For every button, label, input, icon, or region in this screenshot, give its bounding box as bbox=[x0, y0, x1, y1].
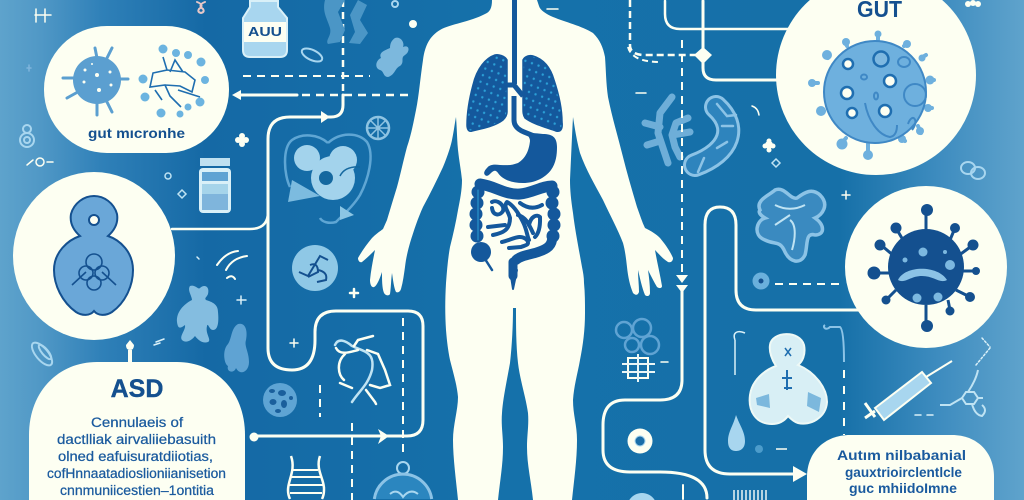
left lung bbox=[467, 55, 507, 131]
icon: rings and nodes bbox=[628, 272, 844, 500]
icon: water drop bbox=[728, 415, 745, 451]
body text: olned eafuisuratdiiotias, bbox=[58, 449, 213, 464]
icon: tangled chain and chip bbox=[616, 319, 659, 382]
icon: light blob bbox=[376, 38, 409, 77]
icon: heart with mouse shape bbox=[285, 135, 371, 223]
icon: jar bbox=[199, 158, 231, 213]
card text: Autım nilbabanial bbox=[837, 448, 966, 463]
card text: guc mhiidoImne bbox=[849, 481, 958, 496]
icon: DNA ladder bbox=[288, 456, 324, 499]
icon: molecule bbox=[940, 370, 985, 416]
trachea and esophagus bbox=[506, 0, 534, 136]
body text: Cennulaeis of bbox=[91, 415, 183, 430]
icon: AUU bottle bbox=[243, 1, 287, 57]
icon: edge beans and rings bbox=[20, 1, 985, 369]
panel: GUT circle bbox=[776, 0, 976, 175]
icon: dark virus bbox=[868, 204, 980, 332]
panel: dark virus circle bbox=[845, 186, 1007, 348]
icon: top coral shape bbox=[324, 0, 368, 44]
icon: signal arcs bbox=[217, 251, 247, 279]
icon: dotted circle bbox=[263, 383, 297, 417]
large intestine bbox=[470, 184, 560, 289]
arrowheads and nodes bbox=[126, 47, 807, 482]
panel: autism microbiome card bbox=[807, 435, 994, 500]
icon: small wheel bbox=[367, 117, 389, 139]
icon: central squiggle microbe bbox=[335, 336, 390, 404]
icon: circled molecule bbox=[292, 245, 338, 291]
stomach bbox=[484, 132, 557, 183]
icon: bulb microbe bbox=[374, 462, 432, 499]
flow lines: right network bbox=[603, 0, 860, 499]
panel: ASD figure circle bbox=[13, 172, 175, 340]
panel: gut microbiome bbox=[44, 26, 229, 153]
icon: tangled protein bbox=[757, 189, 825, 261]
icon: large microbe bbox=[808, 30, 934, 160]
body text: cnnmuniicestien–1ontitia bbox=[60, 483, 215, 498]
panel: ASD text card bbox=[29, 362, 245, 500]
body text bbox=[47, 415, 226, 498]
icon: pale figure bbox=[750, 334, 827, 424]
body text: cofHnnaatadioslioniianisetion bbox=[47, 466, 226, 481]
body silhouette bbox=[358, 0, 673, 500]
small intestine bbox=[488, 201, 542, 248]
icon: AUU bottle: AUU bbox=[248, 24, 282, 39]
body text: dactlliak airvaliiebasuith bbox=[57, 432, 216, 447]
right lung bbox=[523, 56, 562, 131]
card text: gauxtrioirclentlcle bbox=[845, 465, 962, 480]
icon: bacteria network bbox=[138, 44, 209, 118]
icon: figure with brain bbox=[54, 196, 133, 315]
icon: second figure blob bbox=[224, 324, 249, 372]
card text bbox=[837, 448, 966, 496]
icon: round microbe bbox=[63, 48, 128, 115]
icon: right coral bbox=[645, 97, 690, 163]
heading: ASD: ASD bbox=[111, 375, 163, 403]
decorative small marks bbox=[27, 2, 990, 415]
icon: bottom comb jar bbox=[734, 490, 766, 500]
icon: white clover bbox=[235, 0, 981, 152]
lungs and airway bbox=[467, 0, 562, 136]
icon: mitochondrion bbox=[695, 104, 736, 172]
label: gut microbiome: gut mıcronhe bbox=[88, 125, 185, 141]
icon: figure blob bbox=[177, 286, 218, 343]
icon: syringe bbox=[865, 361, 952, 420]
flow lines: left network bbox=[172, 0, 423, 500]
